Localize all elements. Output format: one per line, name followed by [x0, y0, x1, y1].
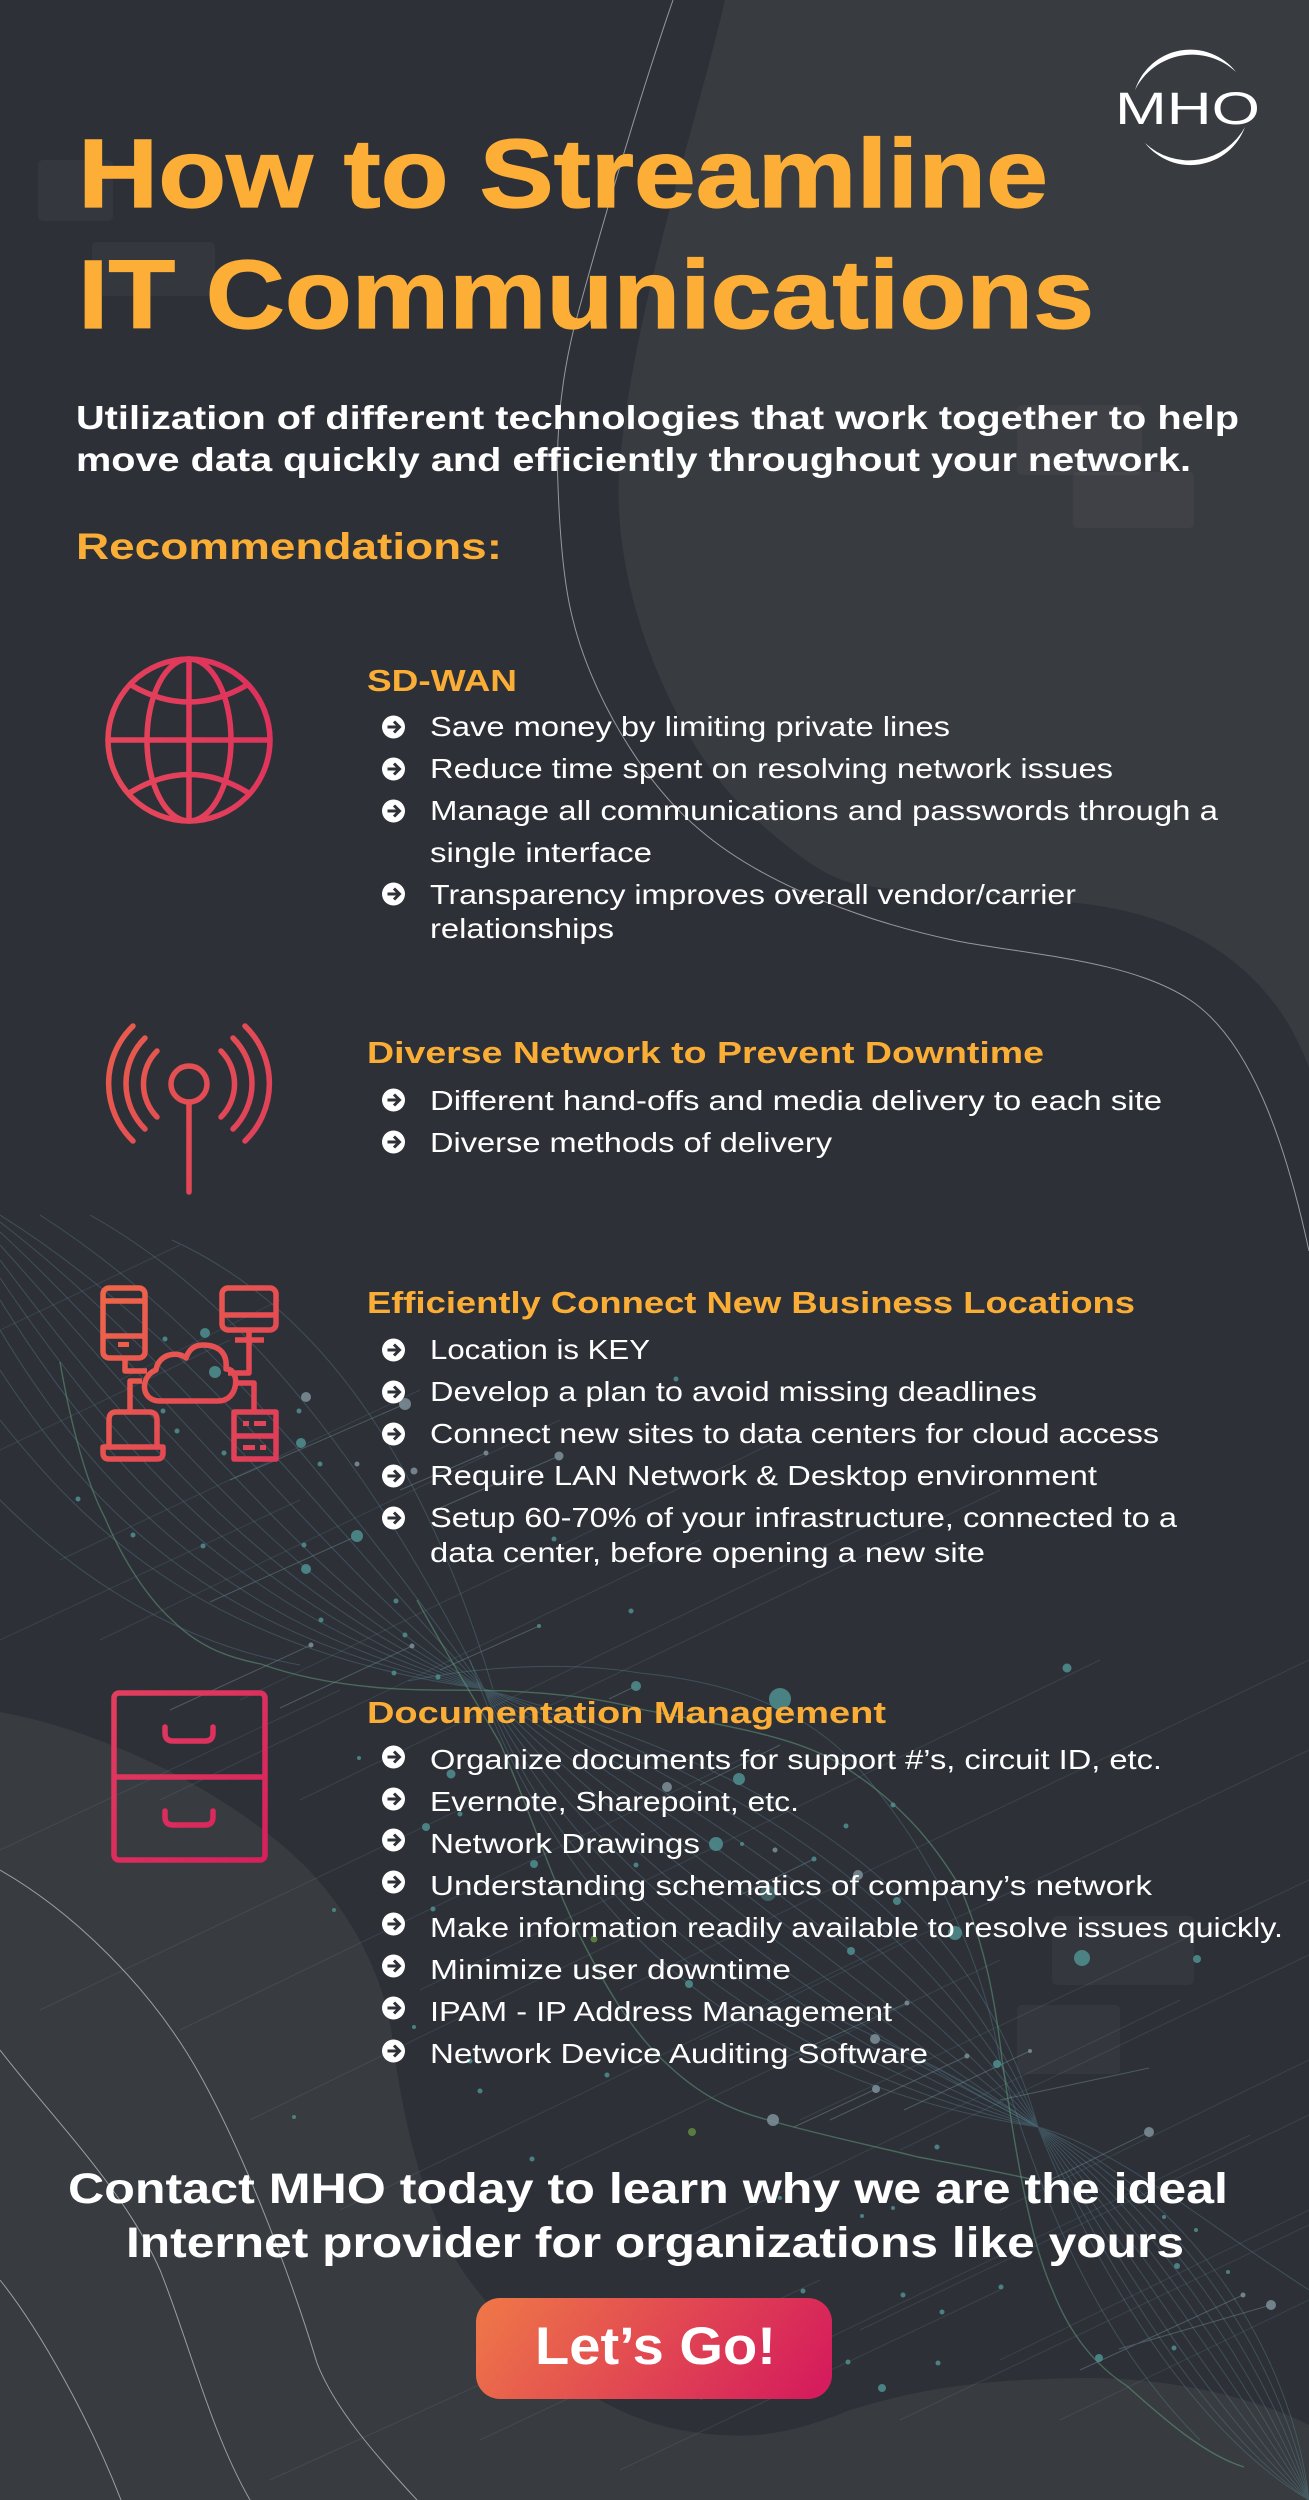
icon: globe: [108, 659, 270, 821]
bullet list: Documentation Management: Minimize user downtime: [430, 1954, 791, 1985]
section: Diverse Network: [367, 1035, 1162, 1158]
logo wordmark: MHO: [1115, 83, 1260, 134]
bullet list: Efficiently Connect: data center, before opening a new site: [430, 1537, 985, 1568]
data network: grey dots: [301, 1392, 1276, 2310]
title: IT Communications: [78, 240, 1094, 349]
data network: bright streaks: [170, 1404, 1271, 2370]
button: Let's Go: [476, 2298, 832, 2399]
icon: cloud network: [103, 1288, 276, 1459]
heading: SD-WAN: SD-WAN: [367, 663, 517, 698]
cloud: [144, 1345, 236, 1401]
bullet list: SD-WAN: Transparency improves overall vendor/carrier: [430, 879, 1076, 910]
data network: green curves: [60, 1362, 1244, 2467]
bullet list: SD-WAN: relationships: [430, 913, 614, 944]
background shape: top right: [619, 0, 1309, 1068]
button: Let's Go: Let’s Go!: [535, 2317, 776, 2376]
bullet list: Documentation Management: IPAM - IP Address Management: [430, 1996, 892, 2027]
bullet list: Documentation Management: Make information readily available to resolve issues quickly.: [430, 1912, 1283, 1943]
call to action text: Internet provider for organizations like yours: [126, 2219, 1184, 2267]
phone: [103, 1288, 145, 1358]
heading: recommendations: Recommendations:: [76, 526, 502, 567]
bullet list: SD-WAN: Save money by limiting private lines: [430, 711, 950, 742]
logo bottom arc: [1145, 127, 1245, 165]
bullet list: SD-WAN: single interface: [430, 837, 652, 868]
title: How to Streamline: [78, 119, 1048, 228]
bullet list: SD-WAN: [382, 711, 1219, 944]
call to action text: Contact MHO today to learn why we are the ideal: [68, 2165, 1228, 2213]
data network: green dots: [590, 1936, 696, 2136]
bullet list: Efficiently Connect: [382, 1334, 1178, 1568]
bullet list: Efficiently Connect: Connect new sites to data centers for cloud access: [430, 1418, 1159, 1449]
section: Documentation Management: [367, 1695, 1283, 2069]
call to action text: [68, 2165, 1228, 2267]
bullet list: Efficiently Connect: Develop a plan to avoid missing deadlines: [430, 1376, 1037, 1407]
heading: Documentation Management: Documentation Management: [367, 1695, 886, 1730]
section: SD-WAN: [367, 663, 1219, 944]
background shape: bottom left: [0, 1712, 1309, 2500]
monitor: [222, 1288, 276, 1373]
bullet list: Efficiently Connect: Setup 60-70% of your infrastructure, connected to a: [430, 1502, 1178, 1533]
laptop: [103, 1381, 163, 1459]
subtitle: move data quickly and efficiently throughout your network.: [76, 441, 1191, 478]
heading: Efficiently Connect: Efficiently Connect New Business Locations: [367, 1285, 1135, 1320]
data network: dots: [76, 1328, 1230, 2392]
icon: antenna: [109, 1026, 269, 1192]
bullet list: Documentation Management: Organize documents for support #’s, circuit ID, etc.: [430, 1744, 1162, 1775]
background tiles: [38, 160, 1194, 2074]
subtitle: Utilization of different technologies that work together to help: [76, 399, 1239, 436]
bullet list: SD-WAN: Reduce time spent on resolving network issues: [430, 753, 1113, 784]
heading: Diverse Network: Diverse Network to Prevent Downtime: [367, 1035, 1044, 1070]
section: Efficiently Connect: [367, 1285, 1178, 1568]
subtitle: [76, 399, 1239, 478]
bullet list: SD-WAN: Manage all communications and passwords through a: [430, 795, 1219, 826]
title: [78, 119, 1094, 349]
bullet list: Diverse Network: Diverse methods of delivery: [430, 1127, 832, 1158]
wires: [125, 1358, 147, 1371]
bullet list: Efficiently Connect: Location is KEY: [430, 1334, 650, 1365]
data network: streak lines: [0, 1245, 1309, 2480]
bullet list: Documentation Management: Understanding schematics of company’s network: [430, 1870, 1152, 1901]
logo: MHO: [1115, 50, 1260, 165]
logo top arc: [1135, 50, 1236, 90]
bullet list: Documentation Management: Network Device Auditing Software: [430, 2038, 928, 2069]
bullet list: Diverse Network: [382, 1085, 1162, 1158]
bullet list: Diverse Network: Different hand-offs and media delivery to each site: [430, 1085, 1162, 1116]
bullet list: Documentation Management: Network Drawings: [430, 1828, 700, 1859]
bullet list: Documentation Management: Evernote, Sharepoint, etc.: [430, 1786, 799, 1817]
bullet list: Efficiently Connect: Require LAN Network & Desktop environment: [430, 1460, 1097, 1491]
bullet list: Documentation Management: [382, 1744, 1283, 2069]
server: [234, 1383, 276, 1459]
icon: filing cabinet: [114, 1693, 265, 1860]
data network: fan curves: [0, 1215, 1309, 2500]
